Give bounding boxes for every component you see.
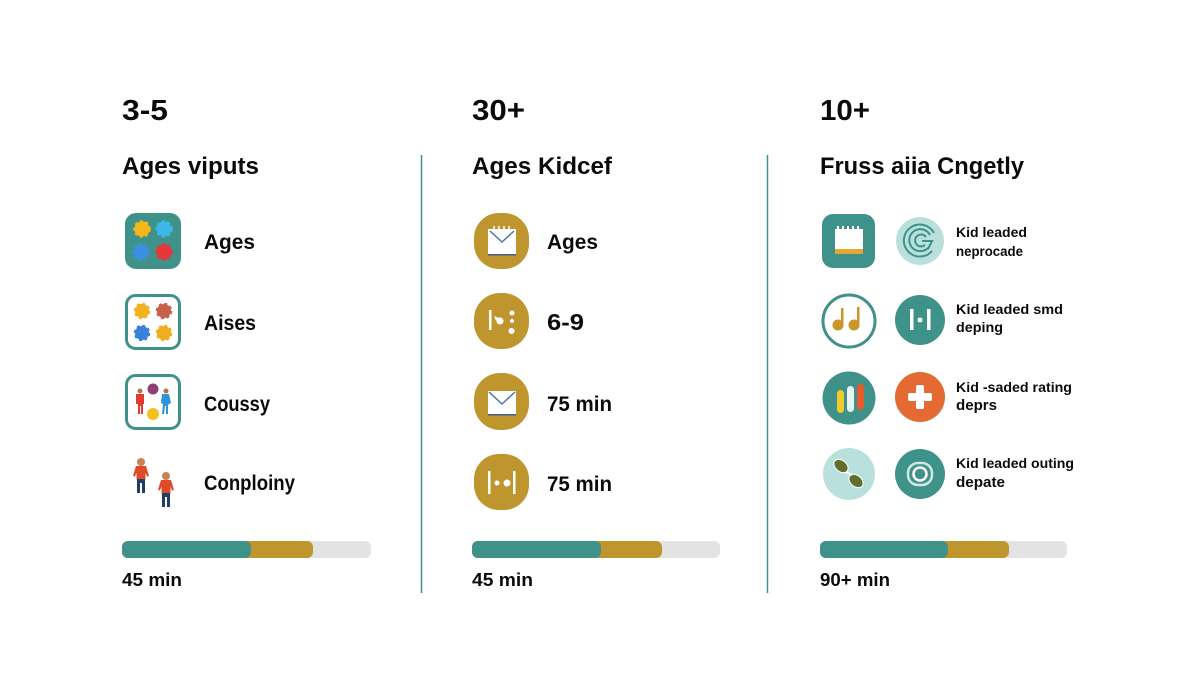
label: Ages: Ages bbox=[204, 231, 255, 254]
text: row 1: Kid leaded bbox=[956, 224, 1027, 240]
icon: children with balls bbox=[126, 376, 180, 428]
text: row 3: Kid -saded rating bbox=[956, 379, 1072, 395]
column 3 heading: Fruss aiia Cngetly bbox=[820, 153, 1025, 180]
label: Conploiny: Conploiny bbox=[204, 472, 295, 495]
icon: linked leaves bbox=[823, 448, 875, 500]
icon: concentric target bbox=[896, 217, 944, 265]
column 2 heading: Ages Kidcef bbox=[472, 153, 613, 180]
icon: colored bars bbox=[822, 372, 876, 424]
column 2 number: 30+ bbox=[472, 95, 525, 127]
icon: puzzle pieces in outlined square bbox=[126, 296, 180, 348]
icon: dots and line bbox=[474, 293, 529, 349]
icon: notepad envelope bbox=[474, 213, 529, 269]
label: Coussy: Coussy bbox=[204, 393, 270, 416]
duration label: 90+ min bbox=[820, 570, 890, 590]
text: row 2 bbox=[956, 301, 1063, 335]
icon: puzzle pieces on teal bbox=[125, 213, 181, 269]
column 1 number: 3-5 bbox=[122, 95, 168, 127]
icon: notepad bbox=[822, 214, 875, 268]
text: row 2: deping bbox=[956, 319, 1003, 335]
panel: column 2 bbox=[472, 95, 720, 590]
text: row 3: deprs bbox=[956, 397, 997, 414]
panel: column 1 bbox=[122, 95, 371, 590]
progress bar bbox=[122, 541, 371, 558]
column 1 heading: Ages viputs bbox=[122, 153, 259, 180]
panel: column 3 bbox=[820, 95, 1074, 590]
icon: plus bbox=[895, 372, 945, 422]
progress bar bbox=[472, 541, 720, 558]
text: row 3 bbox=[956, 379, 1072, 414]
icon: concentric rings bbox=[895, 449, 945, 499]
label: Ages: Ages bbox=[547, 231, 598, 254]
progress bar bbox=[820, 541, 1067, 558]
icon: bars and dot bbox=[895, 295, 945, 345]
duration label: 45 min bbox=[122, 570, 182, 590]
text: row 2: Kid leaded smd bbox=[956, 301, 1063, 317]
text: row 1: neprocade bbox=[956, 243, 1023, 259]
icon: bars and dots bbox=[474, 454, 529, 510]
icon: two children bbox=[133, 458, 174, 507]
text: row 4: Kid leaded outing bbox=[956, 455, 1074, 471]
label: 6-9: 6-9 bbox=[547, 309, 584, 335]
text: row 4: depate bbox=[956, 474, 1005, 491]
label: Aises: Aises bbox=[204, 312, 256, 335]
text: row 1 bbox=[956, 224, 1027, 259]
icon: music notes bbox=[823, 295, 875, 347]
column 3 number: 10+ bbox=[820, 95, 870, 127]
text: row 4 bbox=[956, 455, 1074, 491]
label: 75 min: 75 min bbox=[547, 393, 612, 416]
duration label: 45 min bbox=[472, 570, 533, 590]
icon: envelope bbox=[474, 373, 529, 430]
label: 75 min: 75 min bbox=[547, 473, 612, 496]
